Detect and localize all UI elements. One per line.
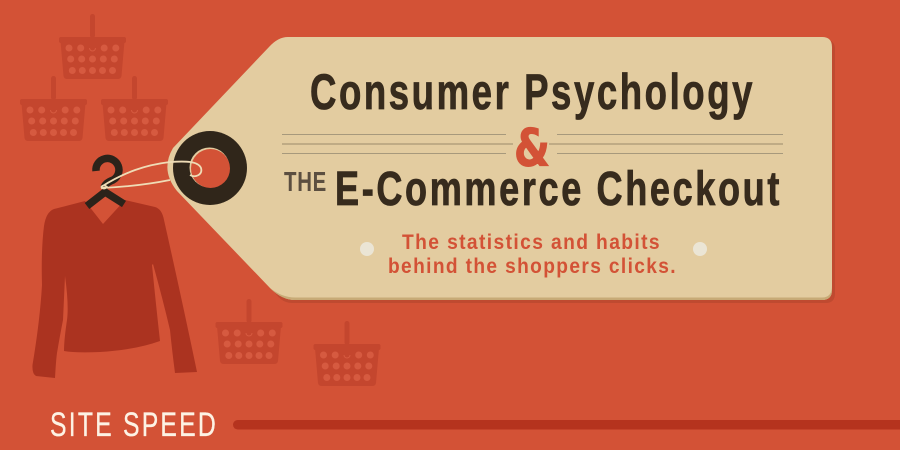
- section bar: [233, 420, 900, 430]
- tag eyelet ring: [173, 131, 247, 205]
- subtitle: [388, 231, 677, 278]
- icon: shopping basket middle right: [101, 76, 168, 141]
- icon: shopping basket top: [59, 14, 126, 79]
- icon: sweater on hanger: [32, 158, 197, 378]
- hanger: [87, 158, 124, 206]
- icon: shopping basket lower left: [216, 299, 282, 364]
- tag bottom edge: [270, 286, 832, 300]
- left dot: [360, 242, 374, 256]
- icon: shopping basket middle left: [20, 76, 87, 141]
- icon: shopping basket lower right: [314, 321, 380, 386]
- ampersand: &: [514, 119, 550, 179]
- sweater: [32, 200, 197, 378]
- section heading: site speed: SITE SPEED: [50, 406, 218, 444]
- subtitle: behind the shoppers clicks.: [388, 255, 677, 278]
- string: [101, 162, 201, 188]
- right dot: [693, 242, 707, 256]
- THE label: THE: [284, 166, 327, 197]
- price tag shadow: [169, 40, 835, 303]
- price tag: [167, 37, 832, 300]
- subtitle: The statistics and habits: [402, 231, 661, 254]
- divider lines: [282, 134, 783, 154]
